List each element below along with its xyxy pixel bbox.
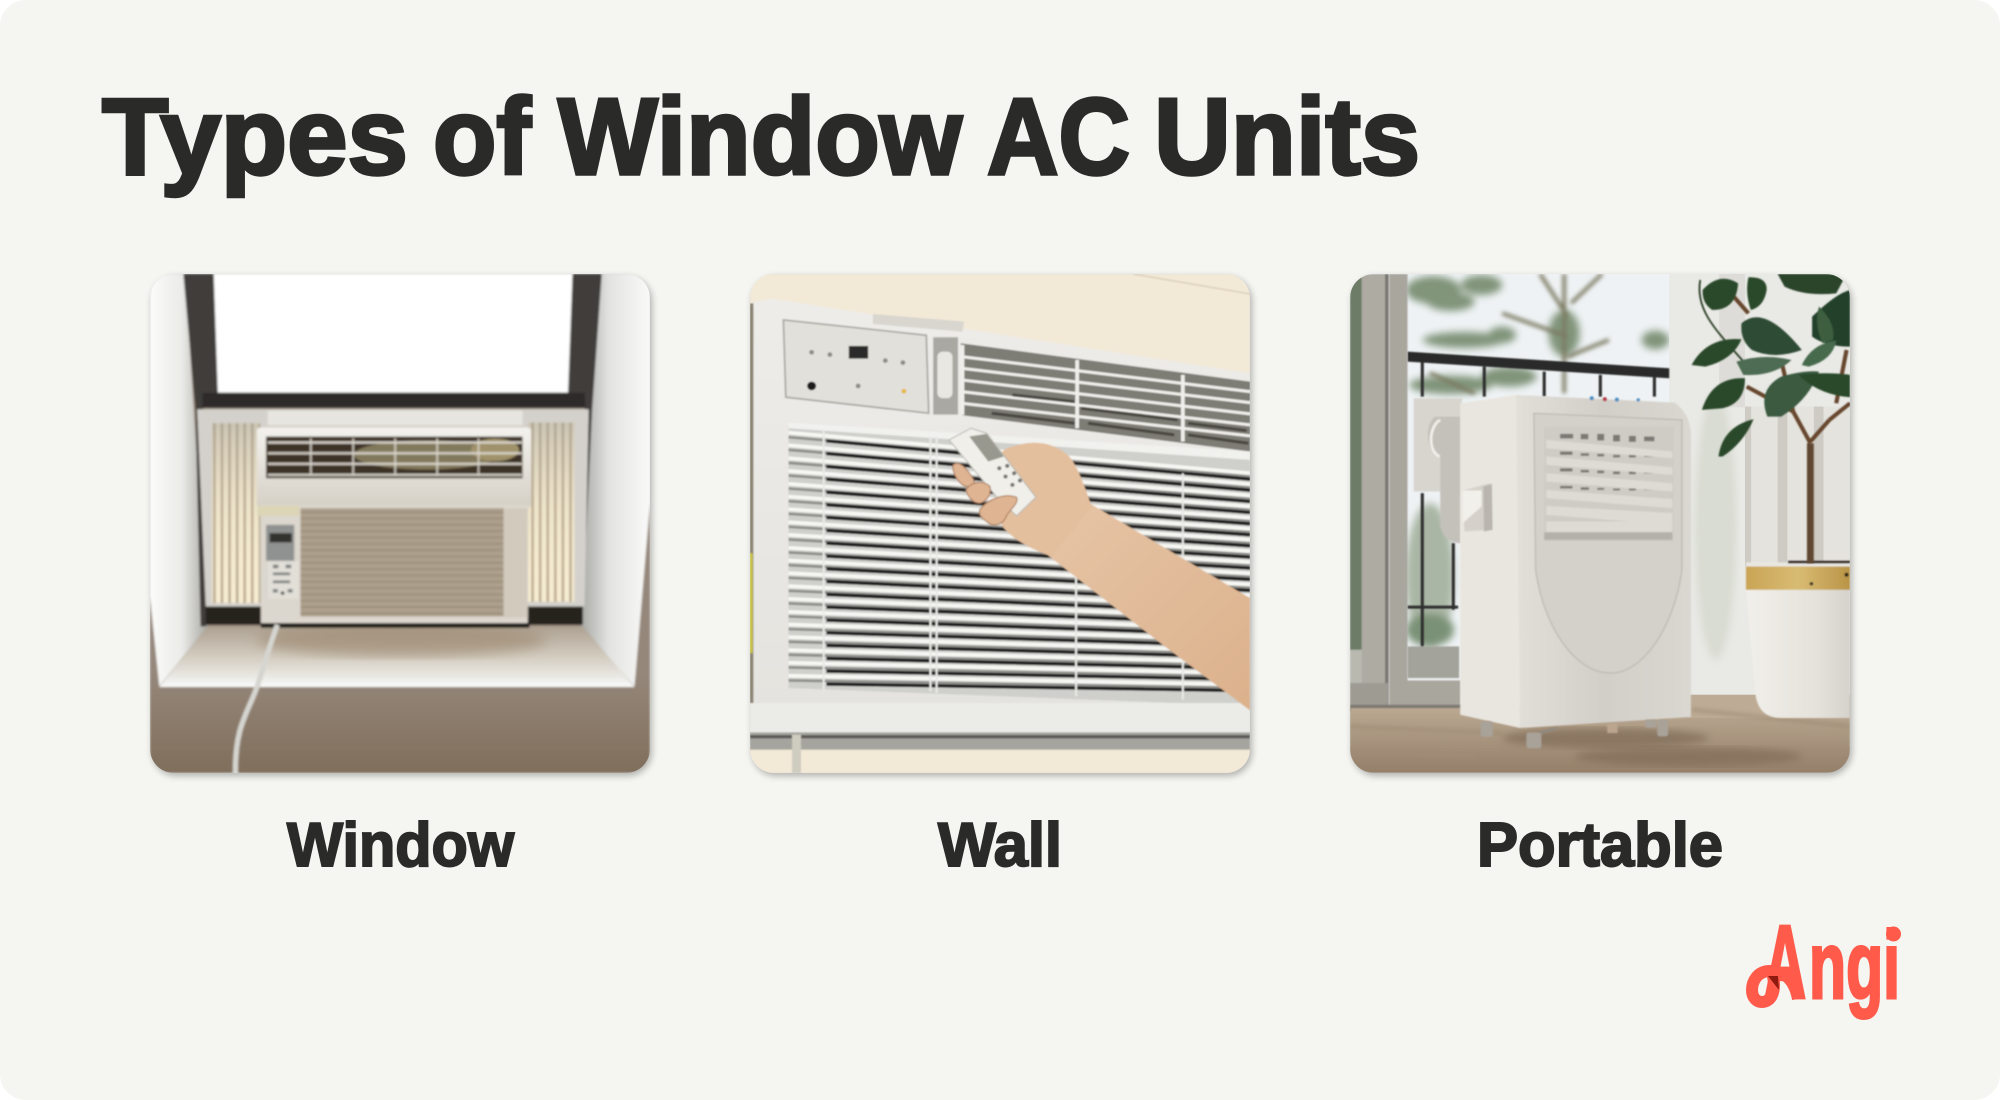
swing knob strip [933, 337, 958, 415]
yellow label [257, 506, 299, 516]
floor shadow [1502, 728, 1709, 748]
photo: portable AC unit [1350, 274, 1850, 773]
duct behind unit [1414, 398, 1462, 543]
door frame [1350, 274, 1464, 711]
power cord [235, 625, 277, 773]
remote control [949, 428, 1036, 516]
unit vent [1544, 427, 1674, 541]
blurred outdoor background [1350, 274, 1674, 707]
label: wall: Wall [938, 810, 1062, 880]
sill shadow [257, 623, 547, 656]
plant [1692, 274, 1850, 563]
left side shadow [750, 303, 753, 736]
label: window: Window [287, 810, 514, 880]
right accordion panel [528, 423, 574, 602]
wooden floor [1350, 695, 1850, 773]
thumb over remote [1004, 446, 1042, 470]
balcony railing [1408, 352, 1669, 678]
title: Types [102, 76, 408, 198]
front grille [300, 508, 504, 616]
window sill [159, 626, 635, 687]
photo: wall AC unit [750, 274, 1250, 773]
unit body [750, 299, 1250, 738]
curtain [1669, 274, 1850, 697]
left accordion panel [212, 423, 260, 603]
right window reveal [581, 274, 650, 686]
ac top housing [257, 428, 531, 508]
side handle [1463, 483, 1493, 531]
conduit pipe [792, 735, 801, 773]
wall moulding line [1133, 274, 1250, 294]
title: of [433, 76, 532, 198]
window glass [213, 274, 573, 396]
caster wheels [1481, 720, 1668, 748]
title [102, 76, 1420, 198]
bottom strip [750, 703, 1250, 733]
cream wall [750, 274, 1250, 773]
portable AC body [1460, 395, 1691, 728]
photo: window AC unit [150, 274, 650, 773]
label: portable: Portable [1477, 810, 1723, 880]
logo: Angi [1752, 905, 1901, 1021]
window bracket panel [197, 409, 589, 606]
control panel [783, 320, 929, 413]
main grille [789, 423, 1250, 706]
title: Window [558, 76, 962, 198]
title: AC [987, 76, 1130, 198]
black base [206, 606, 583, 625]
logo: Angi: ngi [1809, 912, 1900, 1019]
fingers [953, 463, 1017, 525]
plant pot [1746, 561, 1850, 718]
label sticker [873, 314, 964, 332]
left window reveal [150, 274, 208, 686]
dark window frame [183, 274, 602, 626]
arm [1040, 503, 1250, 710]
wall [150, 274, 650, 773]
control panel [266, 525, 299, 599]
ac lower body [261, 505, 528, 623]
logo: Angi: A [1764, 905, 1806, 1021]
palm and thumb [998, 443, 1092, 556]
title: Units [1154, 76, 1420, 198]
upper vent [961, 343, 1250, 452]
top vent [266, 437, 523, 478]
